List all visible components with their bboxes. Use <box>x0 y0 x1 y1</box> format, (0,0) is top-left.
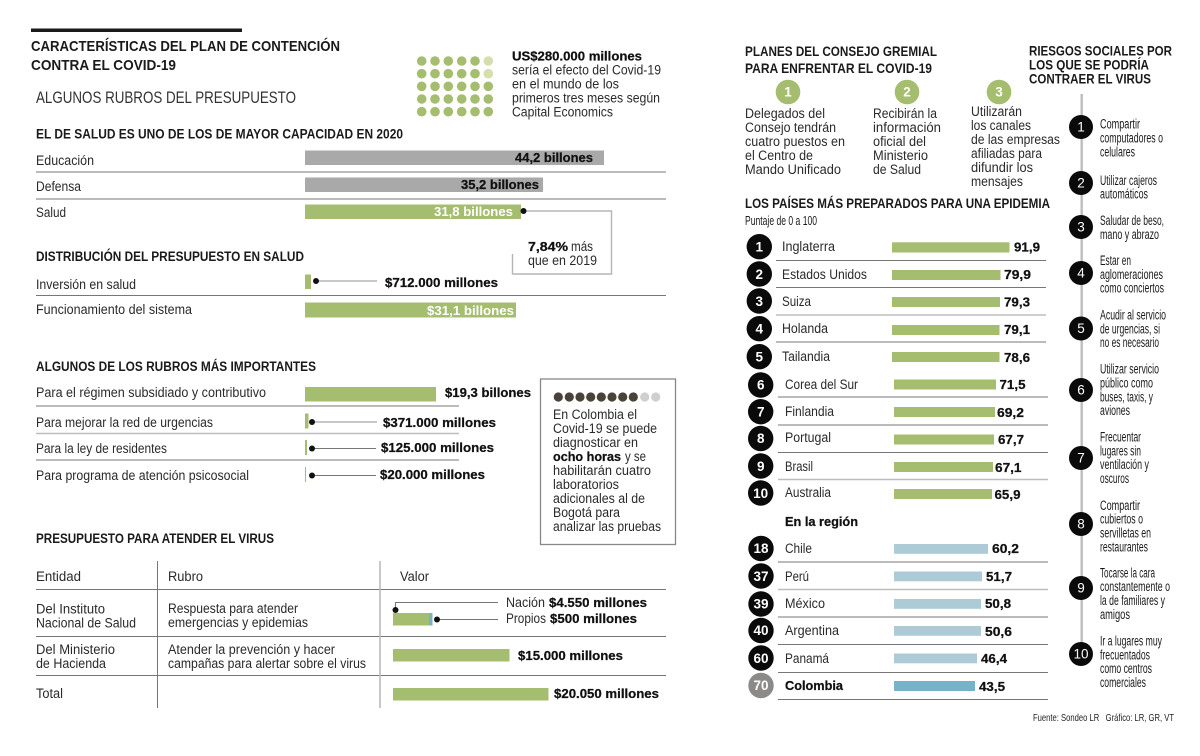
step 1: Consejo tendrán <box>745 120 836 135</box>
icon: dot grid <box>417 56 493 116</box>
table: presupuesto <box>36 561 666 708</box>
timeline spine <box>1080 94 1083 650</box>
table: presupuesto: Total <box>36 686 63 701</box>
ranking: top ten countries: 79,3 <box>1004 295 1030 310</box>
ranking: top ten countries: 5 <box>756 350 764 364</box>
table: presupuesto: Respuesta para atender <box>168 601 298 616</box>
bar chart: rubros importantes: Para programa de atención psicosocial <box>36 468 249 483</box>
risk 6: Utilizar servicio <box>1100 362 1159 376</box>
callout box: diagnóstico en ocho horas: y se <box>625 449 646 464</box>
ranking: regional countries: 43,5 <box>979 679 1005 694</box>
text block: US$280.000 millones: en el mundo de los <box>512 76 619 92</box>
ranking: regional countries: 46,4 <box>981 651 1008 666</box>
callout box: diagnóstico en ocho horas: ocho horas <box>553 449 621 464</box>
risk 1: celulares <box>1100 144 1135 160</box>
step 2: información <box>873 120 941 135</box>
risk 5: de urgencias, si <box>1100 322 1160 336</box>
risk 7: 7 <box>1077 450 1085 466</box>
bar chart: budget comparison <box>36 150 666 220</box>
risk 1: 1 <box>1077 120 1085 134</box>
risk 7: ventilación y <box>1100 457 1149 472</box>
ranking: top ten countries: Estados Unidos <box>782 267 867 282</box>
risk 3: 3 <box>1077 220 1085 234</box>
risk 6: 6 <box>1077 382 1085 398</box>
callout box: diagnóstico en ocho horas: Covid-19 se puede <box>553 421 657 436</box>
risk 8: Compartir <box>1100 498 1140 513</box>
ranking: regional countries: 39 <box>753 596 769 612</box>
ranking: top ten countries: 67,7 <box>998 432 1024 447</box>
table: presupuesto: de Hacienda <box>36 656 106 671</box>
risk 3 <box>1069 213 1164 242</box>
risk 8: restaurantes <box>1100 540 1148 554</box>
scale note: Puntaje de 0 a 100 <box>745 213 817 228</box>
heading: planes: PARA ENFRENTAR EL COVID-19 <box>745 60 932 76</box>
ranking: top ten countries: 10 <box>753 486 768 501</box>
step 1: el Centro de <box>745 148 813 163</box>
ranking: top ten countries: 79,9 <box>1004 267 1031 282</box>
bar chart: rubros importantes: $371.000 millones <box>383 415 496 430</box>
step 2: oficial del <box>873 134 926 149</box>
risk 5: 5 <box>1077 321 1085 336</box>
risk 8: 8 <box>1077 516 1085 532</box>
table: presupuesto: Nacional de Salud <box>36 616 136 630</box>
text block: US$280.000 millones: US$280.000 millones <box>512 48 642 64</box>
risk 5: no es necesario <box>1100 335 1159 350</box>
ranking: top ten countries: Inglaterra <box>782 239 835 254</box>
icon: ten dots <box>554 392 660 402</box>
step 3: de las empresas <box>971 132 1060 147</box>
table: presupuesto: emergencias y epidemias <box>168 615 308 630</box>
callout box: diagnóstico en ocho horas <box>540 379 676 544</box>
bar chart: rubros importantes: Para el régimen subsidiado y contributivo <box>36 385 266 400</box>
ranking: regional countries: México <box>785 596 825 611</box>
table: presupuesto: Del Instituto <box>36 602 105 616</box>
table: presupuesto: Valor <box>400 569 429 584</box>
risk 9: 9 <box>1077 580 1085 596</box>
risk 8 <box>1069 498 1151 554</box>
table: presupuesto: $15.000 millones <box>518 648 623 663</box>
panel: planes del consejo gremial <box>745 43 1060 189</box>
callout: 7,84% más que en 2019 <box>512 208 612 274</box>
bar chart: rubros importantes <box>36 385 531 483</box>
callout box: diagnóstico en ocho horas: habilitarán cuatro <box>553 463 651 478</box>
ranking: top ten countries: 67,1 <box>995 460 1022 475</box>
step 3: difundir los <box>971 160 1033 175</box>
table: presupuesto: $500 millones <box>550 611 637 626</box>
ranking: top ten countries: 2 <box>756 267 763 282</box>
table: presupuesto: $4.550 millones <box>549 595 647 610</box>
heading: riesgos: LOS QUE SE PODRÍA <box>1029 56 1149 72</box>
text block: US$280.000 millones: sería el efecto del Covid-19 <box>512 62 661 78</box>
risk 8: cubiertos o <box>1100 512 1143 526</box>
ranking: regional countries: Perú <box>785 569 809 584</box>
risk 2: automáticos <box>1100 186 1148 202</box>
risk 7: oscuros <box>1100 471 1129 486</box>
bar chart: budget comparison: Salud <box>36 205 66 220</box>
ranking: top ten countries: 7 <box>757 404 764 420</box>
risk 10: 10 <box>1073 646 1089 662</box>
risk 10 <box>1069 634 1162 690</box>
callout box: diagnóstico en ocho horas: Bogotá para <box>553 505 620 520</box>
bar chart: rubros importantes: $125.000 millones <box>381 440 494 455</box>
risk 8: servilletas en <box>1100 526 1151 540</box>
callout box: diagnóstico en ocho horas: En Colombia el <box>553 407 637 422</box>
bar chart: rubros importantes: Para la ley de residentes <box>36 441 167 456</box>
risk 4: 4 <box>1077 266 1085 280</box>
bar chart: distribución en salud <box>36 274 666 318</box>
heading: distribución: DISTRIBUCIÓN DEL PRESUPUESTO EN SALUD <box>36 249 304 264</box>
panel: left column budget <box>31 28 676 708</box>
subtitle: ALGUNOS RUBROS DEL PRESUPUESTO <box>36 88 296 107</box>
risk 4: como conciertos <box>1100 280 1164 296</box>
ranking: top ten countries: Australia <box>785 485 831 500</box>
step 3: los canales <box>971 118 1031 133</box>
ranking: regional countries: 51,7 <box>986 569 1012 584</box>
ranking: top ten countries: Tailandia <box>782 349 830 364</box>
step 2: 2 <box>903 84 911 100</box>
risk 7: lugares sin <box>1100 444 1141 458</box>
bar chart: budget comparison: Educación <box>36 153 94 168</box>
risk 2 <box>1069 171 1157 202</box>
ranking: regional countries: 50,6 <box>985 624 1012 639</box>
risk 1: computadores o <box>1100 130 1163 146</box>
title: CONTRA EL COVID-19 <box>31 57 176 74</box>
step 3 <box>971 80 1060 189</box>
ranking: regional countries: 60 <box>753 651 769 666</box>
ranking: regional countries: 50,8 <box>985 596 1011 611</box>
step 2: de Salud <box>873 162 921 177</box>
step 1 <box>745 80 845 177</box>
text block: US$280.000 millones: Capital Economics <box>512 104 613 120</box>
ranking: regional countries: Chile <box>785 541 812 556</box>
callout box: diagnóstico en ocho horas: diagnosticar en <box>553 435 638 450</box>
heading: rubros importantes: ALGUNOS DE LOS RUBROS MÁS IMPORTANTES <box>36 359 316 374</box>
ranking: top ten countries: 71,5 <box>1000 377 1026 392</box>
heading: planes: PLANES DEL CONSEJO GREMIAL <box>745 43 937 59</box>
bar chart: rubros importantes: $20.000 millones <box>380 467 485 482</box>
table: presupuesto: Propios <box>506 611 546 626</box>
risk 7: Frecuentar <box>1100 430 1141 444</box>
ranking: top ten countries: Holanda <box>782 321 828 336</box>
ranking: regional countries: 37 <box>753 569 769 584</box>
step 2: Recibirán la <box>873 106 937 121</box>
ranking: top ten countries: Brasil <box>785 459 813 474</box>
step 1: 1 <box>784 84 792 100</box>
step 1: Delegados del <box>745 106 825 121</box>
risk 10: frecuentados <box>1100 648 1150 662</box>
risk 4 <box>1069 253 1164 296</box>
ranking: top ten countries: 6 <box>757 378 765 392</box>
step 3: afiliadas para <box>971 146 1042 161</box>
table: presupuesto: campañas para alertar sobre el virus <box>168 656 366 671</box>
risk 7 <box>1069 430 1149 486</box>
panel: riesgos sociales <box>1029 42 1172 690</box>
ranking: top ten countries: 69,2 <box>997 405 1024 420</box>
ranking: regional countries: 40 <box>753 623 769 638</box>
bar chart: budget comparison: Defensa <box>36 179 81 194</box>
callout: 7,84% más que en 2019: que en 2019 <box>528 253 597 268</box>
heading: planes <box>745 43 937 76</box>
ranking: regional countries: Panamá <box>785 651 829 666</box>
table: presupuesto: Del Ministerio <box>36 642 115 657</box>
ranking: top ten countries: 3 <box>756 294 764 309</box>
heading: salud capacity: EL DE SALUD ES UNO DE LOS DE MAYOR CAPACIDAD EN 2020 <box>36 126 403 142</box>
risk 5: Acudir al servicio <box>1100 308 1166 322</box>
title: CARACTERÍSTICAS DEL PLAN DE CONTENCIÓN <box>31 37 340 55</box>
ranking: top ten countries: 65,9 <box>994 487 1020 502</box>
bar chart: distribución en salud: Inversión en salud <box>36 277 136 292</box>
subheading: en la región: En la región <box>785 514 858 529</box>
bar chart: rubros importantes: Para mejorar la red de urgencias <box>36 415 213 430</box>
ranking: regional countries: Argentina <box>785 623 839 638</box>
ranking: regional countries: 60,2 <box>992 541 1019 556</box>
step 3: mensajes <box>971 174 1023 189</box>
callout: 7,84% más que en 2019: más <box>571 239 593 254</box>
text block: US$280.000 millones: primeros tres meses según <box>512 90 660 106</box>
risk 6: buses, taxis, y <box>1100 390 1153 404</box>
ranking: top ten countries: Finlandia <box>785 404 834 419</box>
ranking: top ten countries: Portugal <box>785 430 831 445</box>
ranking: top ten countries: 1 <box>756 240 764 254</box>
top rule <box>31 28 242 32</box>
risk 3: Saludar de beso, <box>1100 213 1164 228</box>
bar chart: budget comparison: 35,2 billones <box>461 177 539 192</box>
heading: presupuesto para atender el virus: PRESUPUESTO PARA ATENDER EL VIRUS <box>36 531 274 546</box>
risk 5 <box>1069 308 1166 350</box>
heading: riesgos: CONTRAER EL VIRUS <box>1029 70 1151 86</box>
table: presupuesto: Rubro <box>168 569 203 584</box>
risk 2: Utilizar cajeros <box>1100 173 1157 188</box>
heading: riesgos <box>1029 42 1172 86</box>
risk 4: Estar en <box>1100 253 1131 268</box>
title <box>31 37 340 74</box>
ranking: top ten countries: Suiza <box>782 294 811 309</box>
ranking: regional countries <box>748 536 1048 700</box>
risk 1 <box>1069 115 1163 160</box>
risk 9: amigos <box>1100 607 1130 622</box>
ranking: top ten countries <box>747 234 1048 506</box>
callout box: diagnóstico en ocho horas: adicionales al de <box>553 491 645 506</box>
risk 6 <box>1069 362 1159 418</box>
risk 10: como centros <box>1100 661 1152 676</box>
risk 3: mano y abrazo <box>1100 227 1159 242</box>
callout box: diagnóstico en ocho horas: analizar las pruebas <box>553 519 661 534</box>
heading: países: LOS PAÍSES MÁS PREPARADOS PARA UNA EPIDEMIA <box>745 195 1050 211</box>
bar chart: rubros importantes: $19,3 billones <box>445 385 531 400</box>
step 2 <box>873 80 941 177</box>
ranking: top ten countries: 4 <box>756 322 764 336</box>
ranking: top ten countries: 91,9 <box>1014 240 1040 255</box>
ranking: regional countries: 70 <box>753 678 769 693</box>
table: presupuesto: Entidad <box>36 569 81 584</box>
risk 10: comerciales <box>1100 675 1146 690</box>
risk 9: la de familiares y <box>1100 593 1165 608</box>
table: presupuesto: $20.050 millones <box>554 686 659 701</box>
risk 10: Ir a lugares muy <box>1100 634 1162 648</box>
ranking: top ten countries: 8 <box>757 431 765 446</box>
risk 4: aglomeraciones <box>1100 267 1163 282</box>
risk 9 <box>1069 566 1170 622</box>
risk 2: 2 <box>1077 176 1085 190</box>
step 1: cuatro puestos en <box>745 134 845 149</box>
callout box: diagnóstico en ocho horas: laboratorios <box>553 477 619 492</box>
table: presupuesto: Atender la prevención y hacer <box>168 642 335 657</box>
bar chart: distribución en salud: Funcionamiento del sistema <box>36 302 192 317</box>
ranking: top ten countries: 79,1 <box>1004 322 1030 337</box>
panel: países más preparados <box>745 195 1050 700</box>
bar chart: budget comparison: 44,2 billones <box>515 150 593 165</box>
bar chart: distribución en salud: $712.000 millones <box>385 275 498 290</box>
risk 6: público como <box>1100 376 1153 390</box>
bar chart: budget comparison: 31,8 billones <box>434 204 513 219</box>
ranking: regional countries: 18 <box>753 541 769 556</box>
step 1: Mando Unificado <box>745 162 841 177</box>
ranking: regional countries: Colombia <box>785 678 844 693</box>
risk 9: Tocarse la cara <box>1100 566 1155 580</box>
step 3: 3 <box>995 84 1003 100</box>
risk 1: Compartir <box>1100 116 1140 132</box>
step 3: Utilizarán <box>971 104 1022 119</box>
ranking: top ten countries: Corea del Sur <box>785 377 858 392</box>
step 2: Ministerio <box>873 148 928 163</box>
risk 6: aviones <box>1100 403 1130 418</box>
ranking: top ten countries: 9 <box>757 459 764 474</box>
callout: 7,84% más que en 2019: 7,84% <box>528 239 568 254</box>
bar chart: distribución en salud: $31,1 billones <box>427 303 514 318</box>
ranking: top ten countries: 78,6 <box>1004 350 1030 365</box>
table: presupuesto: Nación <box>506 595 545 610</box>
text block: US$280.000 millones <box>512 48 661 120</box>
heading: riesgos: RIESGOS SOCIALES POR <box>1029 42 1172 58</box>
